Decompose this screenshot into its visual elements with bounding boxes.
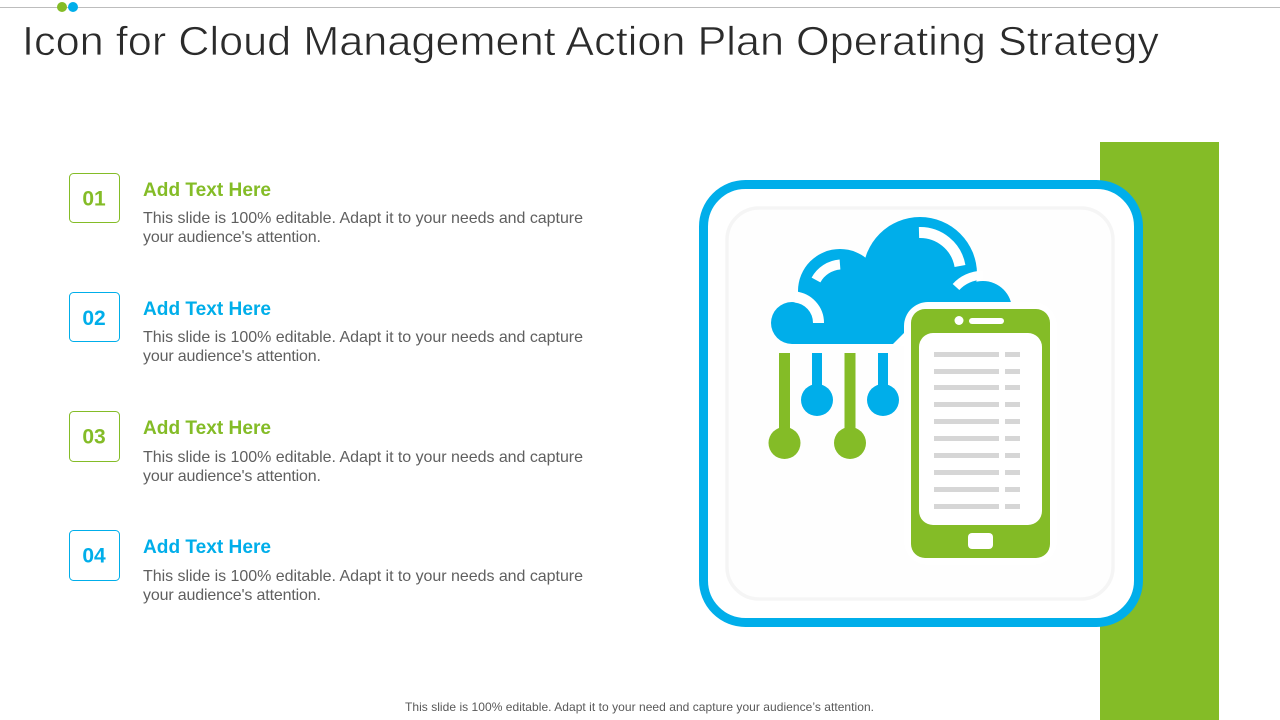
number badge 04 — [70, 530, 120, 580]
number badge 03: 03 — [82, 426, 106, 448]
number badge 01 — [70, 174, 120, 222]
body text 01: your audience's attention. — [143, 229, 321, 246]
heading 02: Add Text Here — [143, 298, 271, 320]
footer note: This slide is 100% editable. Adapt it to your need and capture your audience’s attention. — [405, 700, 874, 714]
list item 02 — [70, 292, 583, 365]
body text 04: This slide is 100% editable. Adapt it to your needs and capture — [143, 568, 583, 585]
list item 04 — [70, 530, 583, 604]
body text 01 — [143, 210, 583, 246]
number badge 01: 01 — [82, 188, 106, 210]
body text 03: This slide is 100% editable. Adapt it to your needs and capture — [143, 449, 583, 466]
heading 01: Add Text Here — [143, 179, 271, 201]
heading 03: Add Text Here — [143, 417, 271, 439]
body text 03: your audience's attention. — [143, 468, 321, 485]
body text 02 — [143, 329, 583, 365]
body text 02: This slide is 100% editable. Adapt it to your needs and capture — [143, 329, 583, 346]
body text 01: This slide is 100% editable. Adapt it to your needs and capture — [143, 210, 583, 227]
number badge 04: 04 — [82, 544, 106, 568]
blue rounded frame — [704, 184, 1138, 622]
inner panel — [727, 208, 1113, 599]
body text 04 — [143, 568, 583, 604]
icon: cloud — [771, 217, 1012, 346]
number badge 02: 02 — [82, 307, 106, 330]
heading 04: Add Text Here — [143, 536, 271, 558]
list item 03 — [70, 412, 583, 485]
icon: smartphone — [904, 302, 1057, 565]
icon: cloud connector wires — [768, 353, 899, 459]
number badge 03 — [70, 412, 120, 462]
icon: header dots — [57, 2, 78, 12]
green accent bar — [1100, 142, 1219, 720]
body text 02: your audience's attention. — [143, 348, 321, 365]
list item 01 — [70, 174, 583, 246]
title: Icon for Cloud Management Action Plan Operating Strategy — [22, 18, 1160, 64]
phone screen list lines — [934, 352, 1020, 509]
body text 04: your audience's attention. — [143, 587, 321, 604]
number badge 02 — [70, 292, 120, 342]
body text 03 — [143, 449, 583, 485]
